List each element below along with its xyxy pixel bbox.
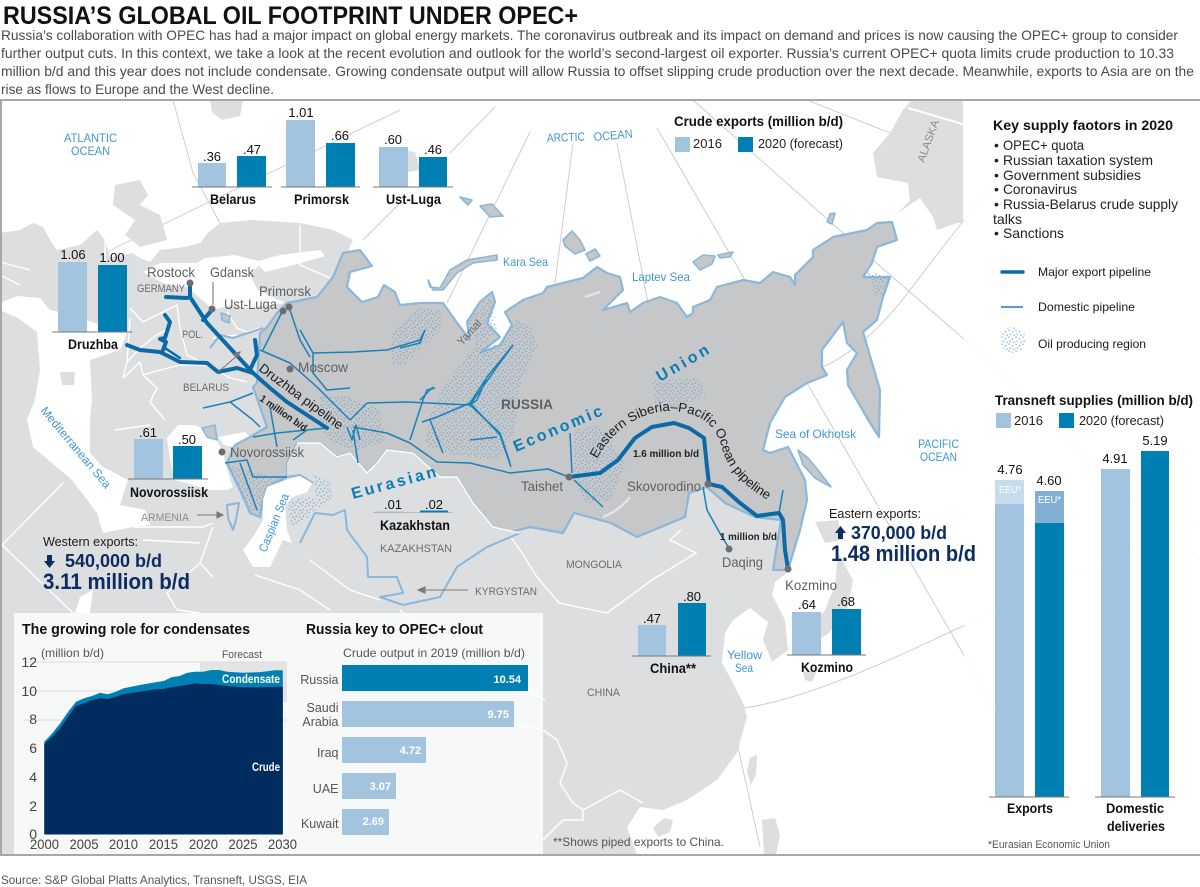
Kazakhstan bbox=[285, 443, 520, 605]
chart: the growing role for condensates: 12 bbox=[21, 654, 37, 670]
bar chart: Kozmino: .68 bbox=[837, 594, 855, 609]
major export pipelines bbox=[127, 283, 788, 569]
text block: key supply factors: Coronavirus bbox=[1003, 181, 1077, 197]
place labels: Rostock bbox=[147, 264, 196, 280]
chart: the growing role for condensates: 6 bbox=[29, 740, 37, 756]
country labels: Yamal bbox=[455, 318, 484, 348]
bar chart: Belarus: Belarus bbox=[210, 191, 256, 207]
country labels: KYRGYSTAN bbox=[475, 586, 537, 598]
text block: key supply factors: • bbox=[994, 167, 999, 183]
bar chart: Druzhba bbox=[52, 247, 132, 352]
seas bbox=[0, 250, 325, 613]
place labels: RUSSIA bbox=[501, 396, 553, 412]
text block: key supply factors: Russia-Belarus crude supply bbox=[1003, 196, 1178, 212]
ocean and sea labels bbox=[38, 127, 959, 675]
bar chart: Primorsk: 1.01 bbox=[288, 105, 314, 120]
location dots bbox=[186, 280, 792, 572]
leader lines and arrows bbox=[197, 282, 468, 593]
legend: map key bbox=[1000, 265, 1151, 353]
intro text block: million b/d and this year does not include condensate. Growing condensate output will allow Russia to offset slipping crude production over the next decade. Meanwhile, exports to Asia are on the bbox=[1, 63, 1194, 79]
text block: key supply factors: talks bbox=[993, 211, 1022, 227]
country borders bbox=[0, 108, 993, 840]
place labels: Primorsk bbox=[259, 283, 312, 299]
bar chart: Kozmino: .64 bbox=[798, 597, 816, 612]
bar chart: China: .80 bbox=[683, 589, 701, 604]
bar chart: Kazakhstan: Kazakhstan bbox=[380, 517, 450, 533]
ocean and sea labels: ARCTIC bbox=[547, 130, 585, 145]
Eurasian Economic Union label bbox=[350, 342, 712, 503]
eastern exports callout: 1.48 million b/d bbox=[831, 541, 976, 566]
chart: the growing role for condensates: The growing role for condensates bbox=[22, 621, 250, 638]
legend: crude exports: Crude exports (million b/d) bbox=[674, 113, 843, 129]
place labels: Novorossiisk bbox=[230, 444, 305, 460]
chart: the growing role for condensates: 2015 bbox=[149, 836, 178, 852]
bar chart: Transneft supplies: EEU* bbox=[1038, 495, 1061, 506]
bar chart: Ust-Luga: .60 bbox=[384, 132, 402, 147]
Eurasian Economic Union label: Eurasian bbox=[350, 464, 438, 503]
bar chart: Transneft supplies: *Eurasian Economic Union bbox=[988, 839, 1110, 851]
bar chart: Transneft supplies: EEU* bbox=[999, 485, 1021, 496]
chart: the growing role for condensates: 2025 bbox=[228, 836, 258, 852]
internal EEU borders bbox=[297, 443, 520, 533]
bar chart: Transneft supplies: Exports bbox=[1007, 800, 1053, 816]
pipeline labels bbox=[256, 360, 777, 543]
bar chart: Druzhba: Druzhba bbox=[68, 336, 118, 352]
bar chart: Transneft supplies: 5.19 bbox=[1142, 433, 1168, 448]
ocean and sea labels: Mediterranean Sea bbox=[38, 404, 114, 491]
chart: the growing role for condensates: 2000 bbox=[30, 836, 59, 852]
footnote: piped exports: **Shows piped exports to China. bbox=[553, 835, 724, 849]
oil producing regions bbox=[228, 270, 890, 527]
country labels: GERMANY bbox=[137, 283, 186, 295]
text block: key supply factors: • bbox=[994, 137, 999, 153]
bar chart: Kazakhstan: .01 bbox=[384, 497, 402, 512]
ocean and sea labels: Kara Sea bbox=[503, 255, 548, 269]
bar chart: Ust-Luga: .46 bbox=[424, 142, 442, 157]
chart: Russia key to OPEC+ clout: 10.54 bbox=[493, 674, 522, 686]
Caspian Sea water bbox=[243, 476, 312, 567]
western exports callout bbox=[43, 534, 190, 594]
text block: key supply factors: • bbox=[994, 196, 999, 212]
chart: the growing role for condensates bbox=[21, 621, 297, 852]
land bbox=[0, 220, 795, 855]
bar chart: Kazakhstan bbox=[373, 497, 453, 533]
country labels: KAZAKHSTAN bbox=[380, 543, 452, 555]
bar chart: Primorsk: .66 bbox=[331, 128, 349, 143]
bar chart: Transneft supplies: deliveries bbox=[1107, 818, 1165, 834]
bar chart: Ust-Luga: Ust-Luga bbox=[386, 191, 441, 207]
bar chart: Belarus: .47 bbox=[243, 142, 261, 157]
chart: the growing role for condensates: 8 bbox=[29, 711, 37, 727]
chart: the growing role for condensates: 2005 bbox=[70, 836, 99, 852]
ocean and sea labels: PACIFIC bbox=[918, 437, 959, 451]
eastern exports callout bbox=[829, 506, 976, 566]
country labels: ARMENIA bbox=[141, 512, 190, 524]
source note: Source: S&P Global Platts Analytics, Transneft, USGS, EIA bbox=[1, 873, 307, 887]
intro text block: further output cuts. In this context, we take a look at the recent evolution and outlook for the world’s second-largest oil exporter. Russia’s current OPEC+ quota limits crude production to 10.33 bbox=[1, 45, 1174, 61]
bar chart: Kazakhstan: .02 bbox=[425, 497, 443, 512]
text block: key supply factors: Russian taxation system bbox=[1003, 152, 1153, 168]
intro text block: rise as flows to Europe and the West decline. bbox=[1, 81, 274, 97]
place labels: Gdansk bbox=[210, 264, 255, 280]
country labels: BELARUS bbox=[183, 382, 229, 394]
text block: key supply factors: • bbox=[994, 181, 999, 197]
intro text block bbox=[1, 27, 1194, 97]
intro text block: Russia’s collaboration with OPEC has had a major impact on global energy markets. The coronavirus outbreak and its impact on demand and prices is now causing the OPEC+ group to consider bbox=[1, 27, 1178, 43]
ocean and sea labels: OCEAN bbox=[593, 127, 633, 144]
bar chart: Novorossiisk bbox=[128, 425, 208, 500]
chart: the growing role for condensates: Crude bbox=[252, 762, 280, 774]
chart: the growing role for condensates: (million b/d) bbox=[41, 646, 104, 660]
bar chart: Kozmino bbox=[787, 594, 866, 675]
chart: Russia key to OPEC+ clout: 2.69 bbox=[363, 816, 384, 828]
bar chart: Belarus: .36 bbox=[203, 149, 221, 164]
legend: map key: Oil producing region bbox=[1038, 337, 1146, 351]
chart: Russia key to OPEC+ clout: Crude output in 2019 (million b/d) bbox=[343, 646, 525, 660]
Baikal and Taymyr lake bbox=[585, 292, 630, 517]
ocean and sea labels: Sea of Okhotsk bbox=[775, 427, 857, 441]
place labels: Kozmino bbox=[785, 577, 837, 593]
bar chart: Ust-Luga bbox=[373, 132, 453, 207]
islands bbox=[113, 100, 853, 855]
chart: the growing role for condensates: 10 bbox=[21, 683, 37, 699]
chart: Russia key to OPEC+ clout: Iraq bbox=[317, 746, 339, 760]
place labels: Moscow bbox=[298, 359, 349, 375]
text block: key supply factors: OPEC+ quota bbox=[1003, 137, 1084, 153]
pipeline labels: Druzhba pipeline bbox=[256, 360, 346, 432]
place labels: Skovorodino bbox=[627, 478, 701, 494]
place labels: Daqing bbox=[722, 554, 763, 570]
Alaska bbox=[873, 100, 963, 230]
chart: Russia key to OPEC+ clout: UAE bbox=[313, 782, 338, 796]
ocean and sea labels: ATLANTIC bbox=[64, 131, 117, 145]
chart: Russia key to OPEC+ clout: 4.72 bbox=[400, 745, 421, 757]
chart: the growing role for condensates: 2010 bbox=[109, 836, 138, 852]
place labels bbox=[147, 264, 837, 593]
eastern exports callout: 370,000 b/d bbox=[851, 523, 947, 543]
bar chart: Belarus bbox=[192, 142, 272, 207]
chart: Russia key to OPEC+ clout: 9.75 bbox=[488, 709, 509, 721]
chart: the growing role for condensates: Forecast bbox=[222, 649, 262, 661]
bar chart: China: .47 bbox=[643, 611, 661, 626]
text block: key supply factors: Government subsidies bbox=[1003, 167, 1141, 183]
bar chart: Primorsk: Primorsk bbox=[294, 191, 349, 207]
country labels: MONGOLIA bbox=[566, 559, 623, 571]
chart: Russia key to OPEC+ clout: 3.07 bbox=[370, 781, 391, 793]
legend: map key: Domestic pipeline bbox=[1038, 300, 1135, 314]
chart: the growing role for condensates: 2 bbox=[29, 798, 37, 814]
ocean and sea labels: Laptev Sea bbox=[632, 270, 690, 284]
bar chart: Novorossiisk: Novorossiisk bbox=[130, 484, 208, 500]
pipeline labels: Eastern Siberia–Pacific Ocean pipeline bbox=[590, 402, 770, 499]
text block: key supply factors bbox=[993, 117, 1178, 241]
pipeline labels: 1 million b/d bbox=[720, 532, 777, 543]
bar chart: Transneft supplies: 2016 bbox=[1014, 413, 1043, 428]
Arctic and Pacific Russian islands bbox=[202, 197, 835, 487]
bar chart: Transneft supplies: 4.60 bbox=[1036, 473, 1062, 488]
bar chart: Transneft supplies: Transneft supplies (million b/d) bbox=[995, 392, 1193, 408]
eastern exports callout: Eastern exports: bbox=[829, 506, 921, 521]
bar chart: Novorossiisk: .61 bbox=[139, 425, 157, 440]
bar chart: China: China** bbox=[650, 660, 696, 676]
chart: Russia key to OPEC+ clout: Saudi bbox=[307, 701, 338, 715]
pipeline labels: 1 million b/d bbox=[257, 393, 309, 434]
western exports callout: 3.11 million b/d bbox=[43, 569, 190, 594]
bar chart: Druzhba: 1.00 bbox=[99, 250, 125, 265]
place labels: Ust-Luga bbox=[224, 296, 277, 312]
pipeline labels: 1.6 million b/d bbox=[633, 449, 699, 460]
Eurasian Economic Union label: Union bbox=[654, 342, 712, 385]
western exports callout: 540,000 b/d bbox=[65, 551, 162, 571]
country labels: CHINA bbox=[587, 687, 621, 699]
bar chart: Transneft supplies: Domestic bbox=[1106, 800, 1164, 816]
chart: Russia key to OPEC+ clout: Kuwait bbox=[301, 817, 339, 831]
country labels bbox=[137, 118, 942, 699]
legend: map key: Major export pipeline bbox=[1038, 265, 1151, 279]
chart: the growing role for condensates: 0 bbox=[29, 826, 37, 842]
chart: the growing role for condensates: 2020 bbox=[189, 836, 218, 852]
text block: key supply factors: • bbox=[994, 152, 999, 168]
chart: the growing role for condensates: 2030 bbox=[268, 836, 297, 852]
bar chart: China bbox=[632, 589, 711, 676]
Eurasian Economic Union borders bbox=[210, 328, 520, 605]
chart: the growing role for condensates: Condensate bbox=[222, 674, 280, 686]
chart: Russia key to OPEC+ clout bbox=[300, 621, 528, 835]
country labels: POL. bbox=[182, 329, 203, 341]
legend: crude exports bbox=[674, 113, 843, 152]
title: RUSSIA’S GLOBAL OIL FOOTPRINT UNDER OPEC+ bbox=[3, 2, 578, 30]
text block: key supply factors: Key supply faotors in 2020 bbox=[993, 117, 1173, 133]
right column background wash bbox=[964, 101, 1200, 854]
place labels: Taishet bbox=[521, 478, 563, 494]
domestic pipelines bbox=[203, 310, 783, 548]
bar chart: Kozmino: Kozmino bbox=[801, 659, 853, 675]
ocean and sea labels: Yellow bbox=[727, 648, 762, 662]
western exports callout: Western exports: bbox=[43, 534, 138, 549]
legend: crude exports: 2016 bbox=[693, 136, 722, 151]
ocean and sea labels: OCEAN bbox=[71, 144, 110, 158]
chart: Russia key to OPEC+ clout: Russia key to OPEC+ clout bbox=[306, 621, 483, 638]
Corsica and Sardinia bbox=[60, 372, 75, 385]
ocean and sea labels: OCEAN bbox=[920, 450, 957, 464]
chart: the growing role for condensates: 4 bbox=[29, 769, 37, 785]
bar chart: Transneft supplies: 4.91 bbox=[1102, 451, 1128, 466]
Russia bbox=[227, 222, 897, 570]
bar chart: Transneft supplies bbox=[988, 392, 1193, 851]
ocean and sea labels: Sea bbox=[735, 661, 753, 675]
legend: crude exports: 2020 (forecast) bbox=[758, 136, 843, 151]
ocean and sea labels: Caspian Sea bbox=[256, 491, 292, 554]
bar chart: Transneft supplies: 2020 (forecast) bbox=[1079, 413, 1164, 428]
text block: key supply factors: • bbox=[994, 225, 999, 241]
panel: condensates and OPEC+ charts background bbox=[14, 613, 543, 855]
Eurasian Economic Union label: Economic bbox=[511, 403, 605, 456]
bar chart: Novorossiisk: .50 bbox=[178, 432, 196, 447]
bar chart: Druzhba: 1.06 bbox=[60, 247, 86, 262]
country labels: ALASKA bbox=[916, 118, 942, 164]
bar chart: Primorsk bbox=[281, 105, 360, 207]
bar chart: Transneft supplies: 4.76 bbox=[997, 462, 1023, 477]
chart: Russia key to OPEC+ clout: Russia bbox=[300, 673, 339, 687]
text block: key supply factors: Sanctions bbox=[1003, 225, 1064, 241]
chart: Russia key to OPEC+ clout: Arabia bbox=[302, 715, 339, 729]
